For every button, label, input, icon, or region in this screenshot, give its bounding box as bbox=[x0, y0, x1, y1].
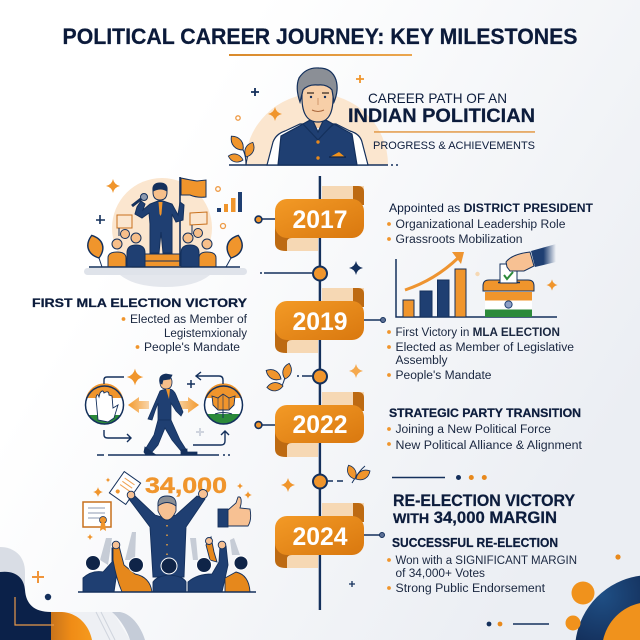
heading: career path: CAREER PATH OF AN bbox=[368, 90, 507, 106]
heading: career path: PROGRESS & ACHIEVEMENTS bbox=[373, 140, 535, 152]
panel: portrait illustration bbox=[227, 68, 398, 165]
icon: small star bbox=[127, 369, 143, 385]
icon: document bbox=[109, 472, 141, 504]
text: first MLA victory list: Elected as Member of Legislative bbox=[396, 342, 574, 354]
arrow: left bbox=[128, 397, 149, 413]
decoration: bottom-right corner shapes bbox=[487, 554, 640, 640]
year ribbon 2019 bbox=[275, 288, 364, 353]
panel: 2017 rally illustration bbox=[84, 177, 247, 287]
text: successful re-election: Strong Public Endorsement bbox=[396, 583, 546, 595]
icon: politician portrait bbox=[267, 68, 368, 165]
text: re-election heading: WITH 34,000 MARGIN bbox=[393, 509, 557, 527]
margin number: 34,000 bbox=[145, 473, 227, 498]
title: POLITICAL CAREER JOURNEY: KEY MILESTONES bbox=[62, 24, 578, 49]
icon: side plants bbox=[85, 233, 245, 267]
text: district president: Grassroots Mobilization bbox=[396, 234, 522, 246]
icon: thumbs up bbox=[218, 497, 251, 527]
text: strategic party transition bbox=[387, 406, 583, 452]
text: first MLA election victory: People's Mandate bbox=[144, 342, 240, 354]
text: first MLA election victory bbox=[32, 296, 248, 354]
heading: career path: INDIAN POLITICIAN bbox=[348, 105, 535, 127]
icon: walking man bbox=[144, 374, 197, 455]
text: first MLA victory list: First Victory in MLA ELECTION bbox=[396, 327, 560, 339]
year ribbon 2024: 2024 bbox=[292, 523, 348, 551]
text: district president bbox=[387, 201, 594, 246]
text: first MLA election victory: Legistemxionaly bbox=[164, 328, 247, 340]
year ribbon 2022 bbox=[275, 392, 364, 457]
chart: rising bars with arrow bbox=[396, 252, 557, 317]
text: district president: Appointed as DISTRICT PRESIDENT bbox=[389, 201, 594, 215]
text: re-election heading: RE-ELECTION VICTORY bbox=[393, 492, 575, 510]
year ribbon 2017: 2017 bbox=[292, 206, 348, 234]
text: strategic party transition: STRATEGIC PARTY TRANSITION bbox=[389, 406, 581, 420]
icon: plant bbox=[227, 133, 257, 165]
icon: podium bbox=[135, 254, 189, 267]
icon: crowd bbox=[108, 212, 216, 267]
panel: 2024 victory illustration bbox=[78, 472, 256, 592]
year ribbon 2024 bbox=[275, 503, 364, 568]
text: successful re-election: SUCCESSFUL RE-ELECTION bbox=[392, 536, 558, 550]
icon: certificate bbox=[83, 502, 111, 531]
icon: mini bars bbox=[217, 192, 242, 212]
text: first MLA victory list bbox=[387, 327, 574, 382]
text: successful re-election: Won with a SIGNIFICANT MARGIN bbox=[396, 555, 577, 567]
text: successful re-election: of 34,000+ Votes bbox=[396, 568, 485, 580]
icon: crowd bbox=[83, 532, 250, 592]
text: re-election heading bbox=[393, 492, 575, 527]
divider with dots bbox=[392, 475, 487, 480]
text: first MLA election victory: FIRST MLA ELECTION VICTORY bbox=[32, 296, 248, 310]
timeline spine bbox=[319, 176, 321, 610]
decoration: bottom-left corner shapes bbox=[0, 547, 145, 640]
arrow connectors bbox=[104, 372, 229, 445]
text: district president: Organizational Leadership Role bbox=[396, 219, 566, 231]
icon: hand party badge bbox=[86, 383, 124, 425]
icon: lotus party badge bbox=[204, 383, 242, 424]
heading: career path bbox=[348, 90, 535, 152]
text: first MLA election victory: Elected as Member of bbox=[130, 314, 248, 326]
year ribbon 2019: 2019 bbox=[292, 308, 348, 336]
text: first MLA victory list: Assembly bbox=[396, 355, 448, 367]
text: first MLA victory list: People's Mandate bbox=[396, 370, 492, 382]
decorative stars and leaves around the timeline bbox=[264, 261, 372, 587]
year ribbon 2022: 2022 bbox=[292, 411, 348, 439]
icon: speaker with flag bbox=[132, 177, 206, 266]
text: successful re-election bbox=[387, 536, 577, 595]
year ribbon 2017 bbox=[275, 186, 364, 251]
timeline connectors and nodes bbox=[255, 216, 386, 538]
arrow: right bbox=[177, 397, 199, 413]
icon: celebrating leader bbox=[127, 490, 208, 577]
text: strategic party transition: New Political Alliance & Alignment bbox=[396, 440, 583, 452]
text: strategic party transition: Joining a New Political Force bbox=[396, 424, 551, 436]
panel: party transition illustration bbox=[86, 369, 242, 455]
icon: ballot box with hand bbox=[475, 244, 558, 317]
